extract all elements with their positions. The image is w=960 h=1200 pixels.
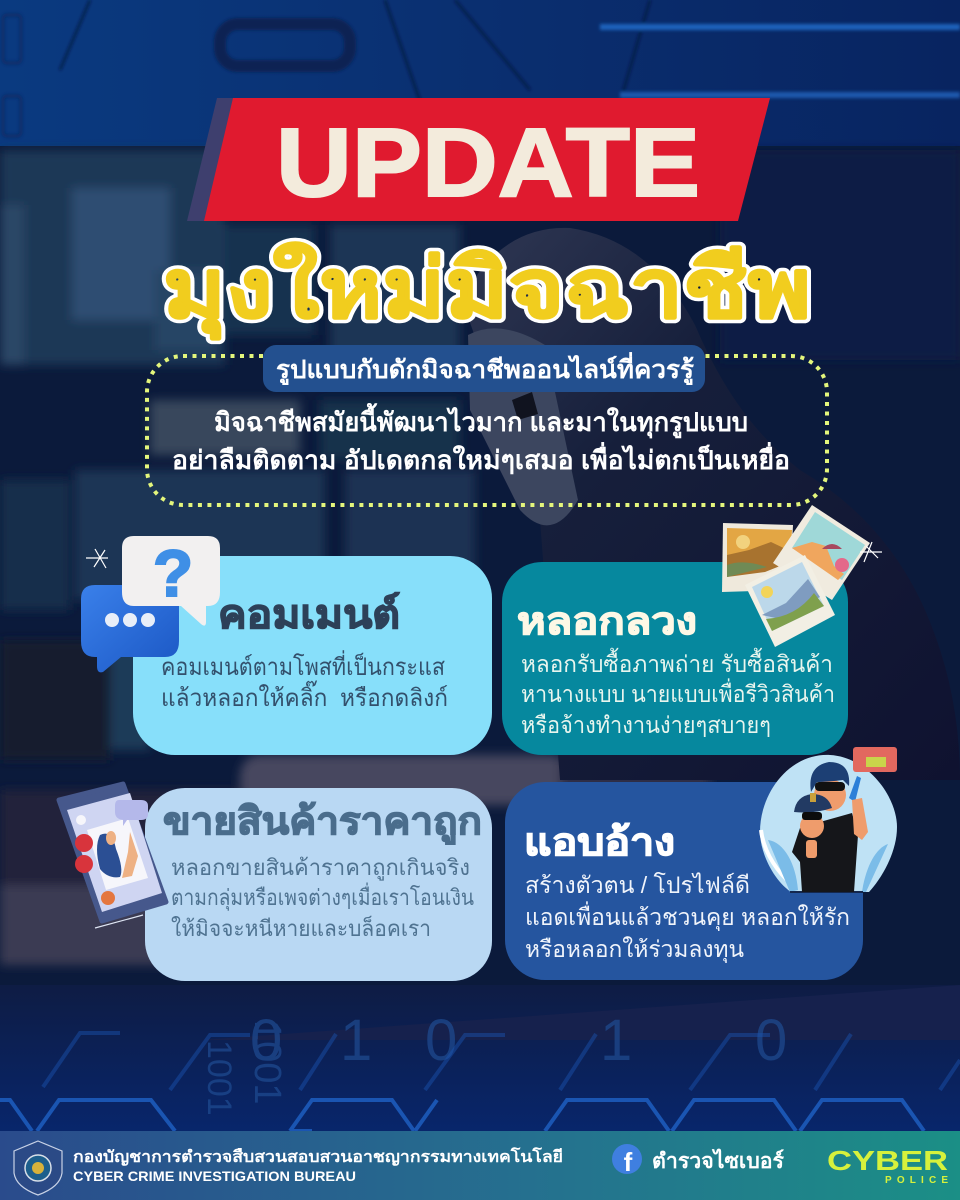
subtitle pill: รูปแบบกับดักมิจฉาชีพออนไลน์ที่ควรรู้ (276, 352, 695, 386)
panel: deceive (502, 562, 848, 755)
banner: UPDATE (187, 98, 770, 221)
bureau name (73, 1146, 563, 1184)
background binary digits: 0 (250, 1008, 282, 1073)
body: impersonation: หรือหลอกให้ร่วมลงทุน (525, 936, 744, 963)
panel: comment (133, 556, 492, 755)
icon: chat bubbles with question mark: ? (153, 536, 193, 610)
body: cheap goods: ให้มิจจะหนีหายและบล็อคเรา (171, 914, 431, 941)
heading: impersonation: แอบอ้าง (524, 822, 675, 864)
heading: deceive: หลอกลวง (517, 601, 697, 643)
intro text (172, 402, 790, 475)
bureau name: CYBER CRIME INVESTIGATION BUREAU (73, 1168, 356, 1184)
title: มุงใหม่มิจฉาชีพ (163, 242, 811, 340)
heading: comment: คอมเมนต์ (218, 592, 400, 637)
intro text: มิจฉาชีพสมัยนี้พัฒนาไวมาก และมาในทุกรูปแบบ (214, 402, 748, 439)
cyber police logo: CYBER (827, 1145, 948, 1176)
background binary digits: 1001 (200, 1040, 238, 1116)
body: deceive: หลอกรับซื้อภาพถ่าย รับซื้อสินค้า (521, 648, 833, 677)
bureau name: กองบัญชาการตำรวจสืบสวนสอบสวนอาชญากรรมทางเทคโนโลยี (73, 1146, 563, 1167)
facebook icon (612, 1144, 642, 1177)
facebook page name: ตำรวจไซเบอร์ (652, 1148, 785, 1173)
icon: phone with social post (59, 784, 166, 928)
body: cheap goods: ตามกลุ่มหรือเพจต่างๆเมื่อเราโอนเงิน (171, 882, 474, 911)
body: impersonation: สร้างตัวตน / โปรไฟล์ดี (525, 872, 750, 898)
body: deceive: หรือจ้างทำงานง่ายๆสบายๆ (521, 712, 771, 738)
cyber police logo: POLICE (885, 1175, 948, 1186)
emblem (14, 1141, 62, 1195)
banner: UPDATE: UPDATE (276, 108, 700, 217)
background binary digits (208, 1019, 785, 1114)
body: comment: แล้วหลอกให้คลิ๊ก หรือกดลิงก์ (161, 680, 448, 712)
cyber police logo (827, 1145, 948, 1186)
panel: cheap goods (145, 788, 492, 981)
background binary digits: 0 (755, 1008, 787, 1073)
body: comment (161, 650, 448, 712)
panel: impersonation (505, 782, 863, 980)
heading: cheap goods: ขายสินค้าราคาถูก (163, 801, 482, 845)
background binary digits: 1 (340, 1008, 372, 1073)
body: comment: คอมเมนต์ตามโพสที่เป็นกระแส (161, 650, 445, 681)
panel: dotted intro box (147, 345, 827, 505)
body: cheap goods (171, 855, 474, 941)
footer bar (0, 1131, 960, 1200)
body: cheap goods: หลอกขายสินค้าราคาถูกเกินจริง (171, 855, 470, 881)
body: deceive: หานางแบบ นายแบบเพื่อรีวิวสินค้า (521, 678, 835, 707)
body: impersonation: แอดเพื่อนแล้วชวนคุย หลอกให้รัก (525, 901, 850, 931)
hooded figure (462, 228, 960, 780)
background binary digits: 1001 (246, 1020, 288, 1105)
icon: scammer behind fake police officer (760, 747, 897, 893)
background binary digits: 1 (600, 1008, 632, 1073)
title: มุงใหม่มิจฉาชีพ (163, 242, 811, 340)
icon: photos (722, 505, 882, 647)
intro text: อย่าลืมติดตาม อัปเดตกลใหม่ๆเสมอ เพื่อไม่ตกเป็นเหยื่อ (172, 441, 790, 475)
body: impersonation (525, 872, 850, 963)
body: deceive (521, 648, 835, 738)
background binary digits: 0 (425, 1008, 457, 1073)
icon: chat bubbles with question mark (81, 536, 220, 672)
subtitle pill (263, 345, 705, 392)
background hexagon lines (0, 1033, 960, 1131)
facebook icon: f (624, 1147, 633, 1177)
